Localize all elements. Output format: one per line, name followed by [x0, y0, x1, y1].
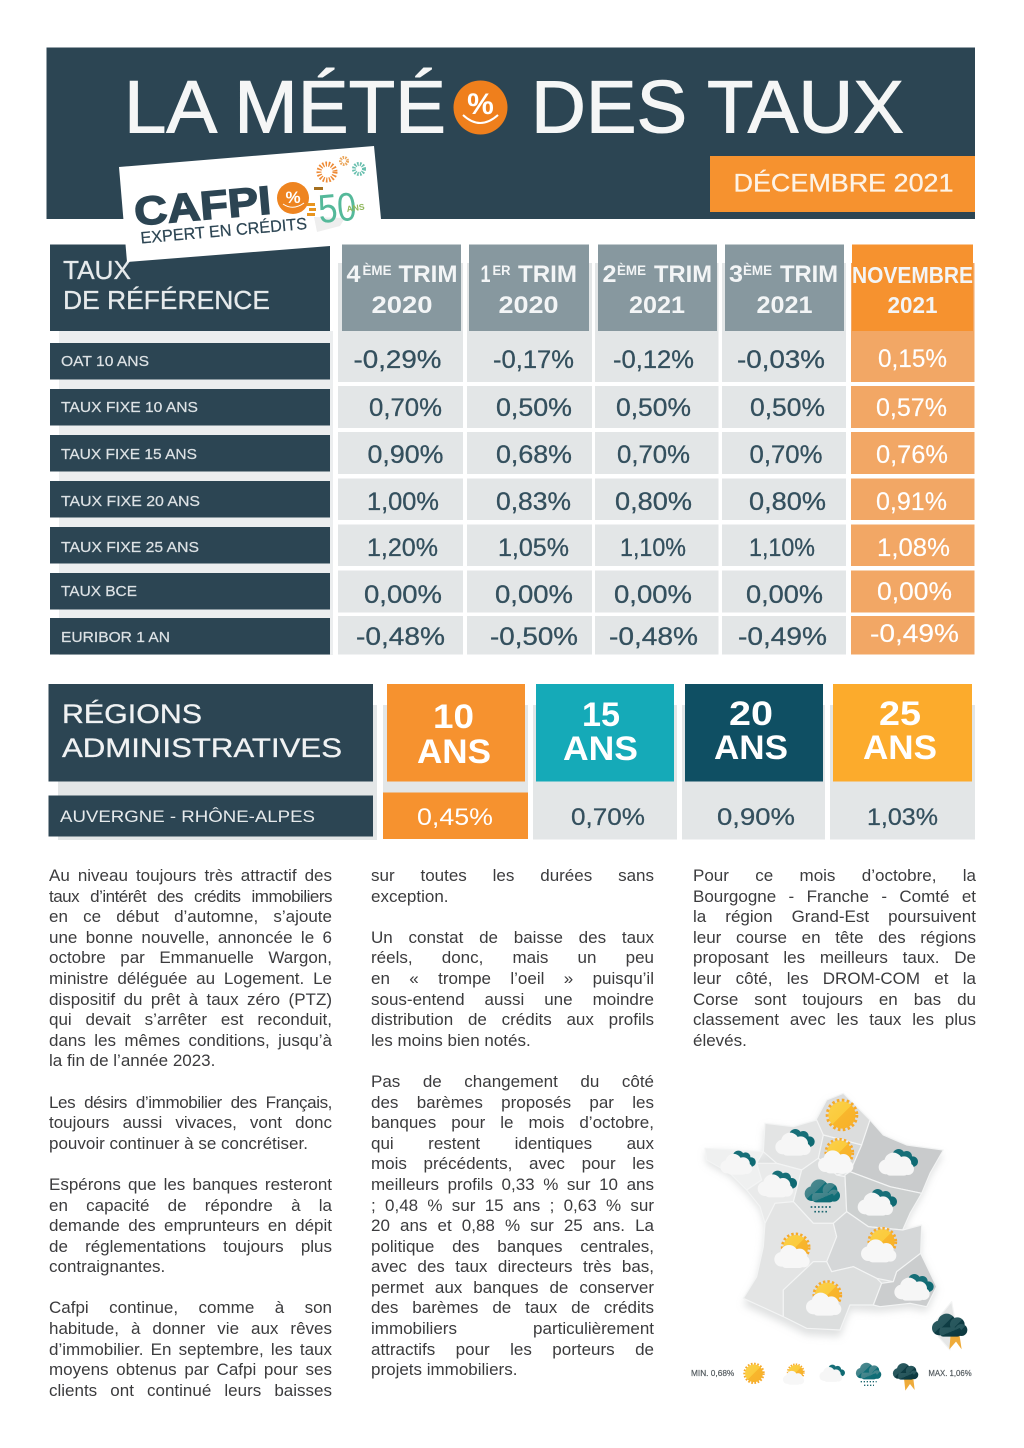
column header: 3ème trim 2021: ÈME [743, 262, 772, 278]
column: 15 ans [536, 684, 674, 831]
weather: Auvergne-Rhone-Alpes sun and cloud [861, 1228, 896, 1262]
column header: 4ème trim 2020: TRIM [398, 261, 458, 288]
logo mascot: % [285, 188, 301, 207]
article column 1: habitude, à donner vie aux rêves [49, 1319, 332, 1338]
icon: smiling percent [454, 80, 508, 134]
regions background bands [58, 705, 975, 840]
article column 1: une bonne nouvelle, annoncée le 6 [49, 928, 332, 947]
column header: 2ème trim 2021 [598, 244, 717, 331]
article column 1: dispositif du prêt à taux zéro (PTZ) [49, 990, 332, 1009]
article column 1: Cafpi continue, comme à son [49, 1298, 332, 1317]
article column 3: proposant les meilleurs taux. De [693, 948, 976, 967]
row: taux fixe 10 ans: TAUX FIXE 10 ANS [61, 400, 198, 416]
article column 1: contraignantes. [49, 1257, 165, 1276]
column header: 4ème trim 2020: 4 [346, 261, 361, 288]
row: taux BCE: 0,00% [746, 581, 823, 609]
article column 2: politique des banques centrales, [371, 1237, 654, 1256]
article column 1: Les désirs d’immobilier des Français, [49, 1093, 332, 1112]
logo card: Cafpi [119, 146, 381, 262]
row: taux fixe 20 ans: 0,80% [749, 488, 826, 516]
row: OAT 10 ans [50, 343, 947, 380]
date badge: DÉCEMBRE 2021 [734, 168, 954, 198]
weather: Corse storm [932, 1314, 967, 1349]
map legend: MAX. 1,06% [928, 1369, 972, 1378]
column: 10 ans [383, 684, 528, 839]
row: euribor 1 an: EURIBOR 1 AN [61, 630, 170, 646]
column: 10 ans: ANS [417, 733, 491, 771]
row: OAT 10 ans: -0,12% [613, 346, 694, 374]
table header: taux de référence: TAUX [63, 255, 131, 285]
article column 2 [371, 866, 654, 1379]
weather: Ile-de-France sun and cloud [818, 1139, 853, 1173]
column header: 4ème trim 2020: 2020 [372, 292, 432, 319]
logo 50 ans [314, 158, 365, 232]
article column 1: la fin de l’année 2023. [49, 1051, 215, 1070]
weather: Centre rain [805, 1179, 840, 1212]
article column 2: meilleurs profils 0,33 % sur 10 ans [371, 1175, 654, 1194]
row: taux BCE: TAUX BCE [61, 584, 137, 600]
row: taux fixe 25 ans [50, 524, 974, 566]
column header: 1er trim 2020: 2020 [498, 292, 558, 319]
row: taux fixe 10 ans: 0,57% [876, 394, 947, 422]
article column 3 [693, 866, 976, 1050]
article column 3: élevés. [693, 1031, 747, 1050]
article column 1: en capacité de répondre à la [49, 1196, 332, 1214]
column header: 3ème trim 2021: TRIM [780, 261, 838, 288]
table row background bands [59, 263, 974, 655]
column header: 3ème trim 2021 [725, 244, 844, 331]
icon: smiling percent: % [467, 88, 494, 121]
row: euribor 1 an: -0,49% [870, 620, 959, 648]
row: taux fixe 25 ans: 1,10% [749, 534, 815, 562]
column: 15 ans: 15 [582, 696, 620, 734]
column: 20 ans: ANS [714, 729, 788, 767]
row: OAT 10 ans: -0,29% [354, 346, 442, 374]
weather: Pays de la Loire cloud [758, 1171, 797, 1197]
row: taux fixe 10 ans: 0,50% [616, 394, 691, 422]
row: OAT 10 ans: OAT 10 ANS [61, 354, 149, 370]
row: euribor 1 an: -0,48% [356, 623, 445, 651]
column header: 4ème trim 2020 [342, 244, 461, 331]
article column 2: mois précédents, avec pour les [371, 1154, 654, 1173]
weather: Nouvelle-Aquitaine sun and cloud [774, 1234, 810, 1268]
column: 15 ans: ANS [563, 730, 638, 768]
column: 20 ans [685, 684, 823, 831]
header banner [46, 48, 975, 219]
article column 2: sous-entend aussi une moindre [371, 990, 654, 1009]
column header: 1er trim 2020: ER [492, 262, 510, 278]
article column 2: exception. [371, 887, 448, 906]
row: taux fixe 10 ans [50, 386, 974, 428]
column header: 4ème trim 2020: ÈME [362, 262, 392, 278]
article column 1: toujours aussi vivaces, vont donc [49, 1113, 332, 1132]
date badge [710, 156, 975, 212]
article column 1: de réglementations toujours plus [49, 1237, 332, 1256]
column: 20 ans: 0,90% [717, 804, 795, 831]
article column 2: sur toutes les durées sans [371, 866, 654, 885]
article column 1: clients ont continué leurs baisses [49, 1381, 332, 1400]
column header: 1er trim 2020: 1 [480, 261, 490, 288]
article column 1: pouvoir continuer à se concrétiser. [49, 1134, 308, 1153]
article column 2: Un constat de baisse des taux [371, 928, 654, 947]
article column 1: demande des emprunteurs en dépit [49, 1216, 332, 1235]
row: euribor 1 an: -0,50% [490, 623, 578, 651]
article column 2: immobiliers particulièrement [371, 1319, 654, 1338]
row: taux BCE: 0,00% [614, 581, 692, 609]
column: 25 ans: ANS [863, 729, 937, 767]
logo 50 ans: ANS [346, 202, 365, 214]
logo 50 ans: 50 [316, 185, 358, 232]
title [124, 66, 904, 148]
article column 1: qui devait s’arrêter est reconduit, [49, 1010, 332, 1029]
row: taux fixe 15 ans: 0,70% [750, 441, 822, 469]
row: taux BCE [50, 570, 974, 612]
row: taux fixe 25 ans: 1,20% [367, 534, 438, 562]
article column 1: ministre déléguée au Logement. Le [49, 969, 332, 988]
article column 3: Bourgogne - Franche - Comté et [693, 887, 976, 906]
row: OAT 10 ans: 0,15% [878, 345, 947, 373]
weather: PACA cloud [894, 1274, 934, 1301]
row: taux fixe 15 ans: 0,76% [876, 441, 948, 469]
map legend [691, 1363, 972, 1391]
row: taux BCE: 0,00% [495, 581, 573, 609]
article column 3: la région Grand-Est poursuivent [693, 907, 976, 926]
article column 3: leur course en tête des régions [693, 928, 976, 947]
article column 1: en ce début d’automne, s’ajoute [49, 907, 332, 926]
weather: Bourgogne cloud [858, 1189, 897, 1216]
row: taux fixe 25 ans: 1,10% [620, 534, 686, 562]
column header: 1er trim 2020 [469, 244, 589, 331]
regions heading: ADMINISTRATIVES [62, 733, 342, 763]
row: OAT 10 ans: -0,03% [737, 346, 825, 374]
row: euribor 1 an: -0,49% [738, 623, 827, 651]
map of France with weather icons [705, 1093, 967, 1350]
row: taux fixe 20 ans: 0,80% [615, 488, 692, 516]
column header: 1er trim 2020: TRIM [518, 261, 577, 288]
weather: Grand Est cloud [879, 1149, 918, 1176]
title: LA MÉTÉ [124, 66, 446, 148]
article column 1: Espérons que les banques resteront [49, 1175, 332, 1194]
article column 2: en « trompe l’oeil » puisqu’il [371, 969, 654, 988]
row: taux fixe 15 ans: 0,90% [368, 441, 444, 469]
column header: 2ème trim 2021: ÈME [617, 262, 646, 278]
row: taux fixe 20 ans: 0,83% [496, 488, 571, 516]
region row label [48, 796, 373, 836]
row: taux fixe 10 ans: 0,50% [496, 394, 572, 422]
row: taux fixe 15 ans: TAUX FIXE 15 ANS [61, 447, 197, 463]
weather: Hauts-de-France sun [827, 1100, 857, 1130]
weather: Occitanie sun and cloud [806, 1282, 841, 1316]
row: taux fixe 25 ans: 1,08% [877, 534, 950, 562]
article column 3: Corse sont toujours en bas du [693, 990, 976, 1009]
article column 2: des barèmes proposés par les [371, 1093, 654, 1112]
row: taux fixe 10 ans: 0,70% [369, 394, 442, 422]
logo wordmark: CAFPI [132, 179, 273, 234]
article column 2: 20 ans et 0,88 % sur 25 ans. La [371, 1216, 654, 1235]
row: OAT 10 ans: -0,17% [493, 346, 574, 374]
article column 2: les moins bien notés. [371, 1031, 531, 1050]
logo mascot [277, 182, 323, 216]
region row label: AUVERGNE - RHÔNE-ALPES [60, 807, 315, 826]
article column 1: Au niveau toujours très attractif des [49, 866, 332, 885]
row: taux fixe 20 ans: 0,91% [876, 488, 947, 516]
article column 1: d’immobilier. En septembre, les taux [49, 1340, 332, 1359]
article column 2: qui restent identiques aux [371, 1134, 654, 1153]
article column 1: taux d’intérêt des crédits immobiliers [49, 887, 332, 906]
column header: 3ème trim 2021: 3 [729, 261, 743, 288]
regions heading [48, 684, 373, 782]
article column 1 [49, 866, 332, 1400]
row: euribor 1 an: -0,48% [609, 623, 698, 651]
column header: 2ème trim 2021: 2021 [629, 292, 685, 319]
table header: taux de référence: DE RÉFÉRENCE [63, 285, 270, 315]
column header: 2ème trim 2021: TRIM [654, 261, 712, 288]
column header: novembre 2021 [852, 244, 973, 331]
row: taux fixe 10 ans: 0,50% [750, 394, 825, 422]
column header: novembre 2021: 2021 [888, 292, 938, 318]
table header: taux de référence [50, 244, 330, 331]
logo wordmark: EXPERT EN CRÉDITS [140, 214, 308, 247]
column: 25 ans: 1,03% [867, 804, 938, 831]
regions heading: RÉGIONS [62, 699, 202, 729]
row: taux fixe 15 ans: 0,70% [617, 441, 690, 469]
article column 1: dans les mêmes conditions, jusqu’à [49, 1031, 332, 1050]
article column 2: attractifs pour les porteurs de [371, 1340, 654, 1359]
article column 3: classement avec les taux les plus [693, 1010, 976, 1029]
article column 2: avec des taux directeurs très bas, [371, 1257, 654, 1276]
title: DES TAUX [531, 66, 904, 148]
article column 2: ; 0,48 % sur 15 ans ; 0,63 % sur [371, 1196, 654, 1214]
column: 10 ans: 0,45% [417, 804, 493, 831]
row: taux fixe 25 ans: TAUX FIXE 25 ANS [61, 540, 199, 556]
weather: Normandie cloud [775, 1129, 815, 1156]
article column 2: permet aux banques de conserver [371, 1278, 654, 1297]
article column 1: moyens obtenus par Cafpi pour ses [49, 1360, 332, 1379]
row: taux fixe 20 ans [50, 478, 974, 520]
article column 2: distribution de crédits aux profils [371, 1010, 654, 1029]
column header: 2ème trim 2021: 2 [602, 261, 616, 288]
row: taux fixe 15 ans: 0,68% [496, 441, 572, 469]
row: taux BCE: 0,00% [364, 581, 442, 609]
row: taux fixe 15 ans [50, 432, 974, 474]
article column 2: des barèmes de taux de crédits [371, 1298, 654, 1317]
article column 3: leur côté, les DROM-COM et la [693, 969, 976, 988]
row: taux fixe 25 ans: 1,05% [498, 534, 569, 562]
column: 20 ans: 20 [729, 695, 773, 733]
article column 3: Pour ce mois d’octobre, la [693, 866, 976, 885]
logo wordmark [132, 179, 308, 247]
article column 2: banques pour le mois d’octobre, [371, 1113, 654, 1132]
row: taux fixe 20 ans: TAUX FIXE 20 ANS [61, 494, 200, 510]
column: 25 ans: 25 [879, 695, 921, 733]
article column 2: Pas de changement du côté [371, 1072, 654, 1091]
column: 10 ans: 10 [433, 698, 474, 736]
map legend: MIN. 0,68% [691, 1369, 734, 1378]
column header: novembre 2021: NOVEMBRE [852, 262, 973, 288]
article column 2: projets immobiliers. [371, 1360, 517, 1379]
row: euribor 1 an [50, 616, 974, 654]
column: 25 ans [833, 684, 972, 831]
column: 15 ans: 0,70% [571, 804, 645, 831]
row: taux fixe 20 ans: 1,00% [367, 488, 439, 516]
weather: Bretagne cloud [720, 1151, 756, 1175]
column header: 3ème trim 2021: 2021 [756, 292, 812, 319]
article column 1: octobre par Emmanuelle Wargon, [49, 948, 332, 967]
article column 2: réels, donc, mais un peu [371, 948, 654, 967]
row: taux BCE: 0,00% [877, 578, 952, 606]
